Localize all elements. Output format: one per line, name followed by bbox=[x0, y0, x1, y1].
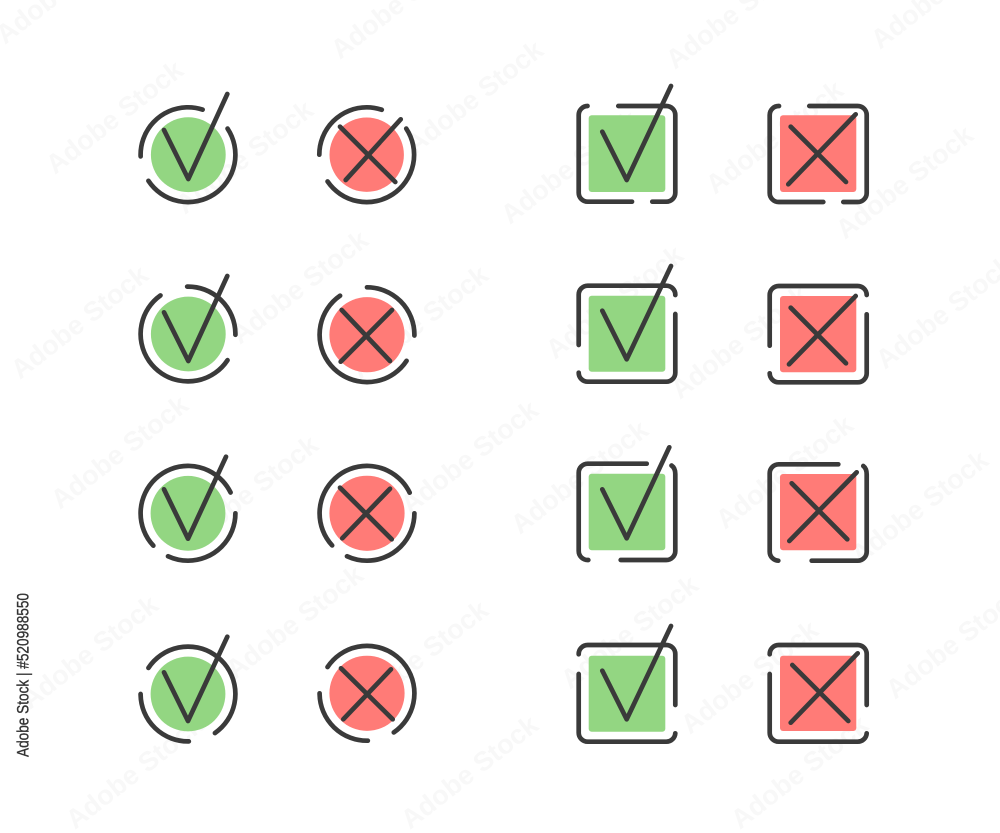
icon: round cross, row 4 bbox=[301, 628, 433, 759]
watermark pattern: Adobe Stock bbox=[60, 709, 210, 833]
watermark pattern: Adobe Stock bbox=[675, 614, 825, 740]
watermark pattern: Adobe Stock bbox=[15, 589, 165, 715]
watermark pattern: Adobe Stock bbox=[495, 104, 645, 230]
watermark pattern: Adobe Stock bbox=[5, 259, 155, 385]
watermark pattern: Adobe Stock bbox=[555, 569, 705, 695]
icon: square check, row 2 bbox=[579, 266, 675, 382]
watermark pattern: Adobe Stock bbox=[175, 429, 325, 555]
icon: square check, row 3 bbox=[579, 447, 675, 560]
icon: round check, row 3 bbox=[121, 446, 255, 580]
watermark pattern: Adobe Stock bbox=[395, 394, 545, 520]
icon: round check, row 4 bbox=[122, 628, 254, 760]
watermark pattern: Adobe Stock bbox=[40, 54, 190, 180]
icon: round cross, row 2 bbox=[301, 269, 433, 400]
watermark pattern: Adobe Stock bbox=[345, 594, 495, 720]
icon: round cross, row 1 bbox=[301, 89, 432, 220]
icon: square cross, row 3 bbox=[770, 464, 867, 561]
watermark pattern: Adobe Stock bbox=[830, 119, 980, 245]
watermark pattern: Adobe Stock bbox=[170, 94, 320, 220]
watermark pattern: Adobe Stock bbox=[395, 709, 545, 833]
icon: square check, row 4 bbox=[579, 626, 675, 742]
watermark pattern: Adobe Stock bbox=[700, 74, 850, 200]
icon: round check, row 2 bbox=[122, 268, 254, 400]
icon: square cross, row 1 bbox=[770, 106, 867, 202]
icon: round check, row 1 bbox=[122, 89, 254, 220]
watermark pattern: Adobe Stock bbox=[710, 409, 860, 535]
watermark pattern: Adobe Stock bbox=[725, 709, 875, 833]
watermark pattern: Adobe Stock bbox=[345, 259, 495, 385]
icon: square cross, row 4 bbox=[770, 645, 867, 742]
watermark pattern: Adobe Stock bbox=[505, 414, 655, 540]
watermark pattern: Adobe Stock bbox=[45, 389, 195, 515]
icon: square cross, row 2 bbox=[770, 286, 867, 382]
watermark pattern: Adobe Stock bbox=[225, 224, 375, 350]
watermark pattern: Adobe Stock bbox=[665, 279, 815, 405]
stock credit text: Adobe Stock | #520988550 bbox=[14, 593, 32, 757]
icon: square check, row 1 bbox=[579, 86, 675, 202]
watermark pattern: Adobe Stock bbox=[540, 239, 690, 365]
watermark pattern: Adobe Stock bbox=[220, 559, 370, 685]
icon: round cross, row 3 bbox=[300, 446, 434, 580]
watermark pattern: Adobe Stock bbox=[845, 444, 995, 570]
watermark pattern: Adobe Stock bbox=[400, 34, 550, 160]
